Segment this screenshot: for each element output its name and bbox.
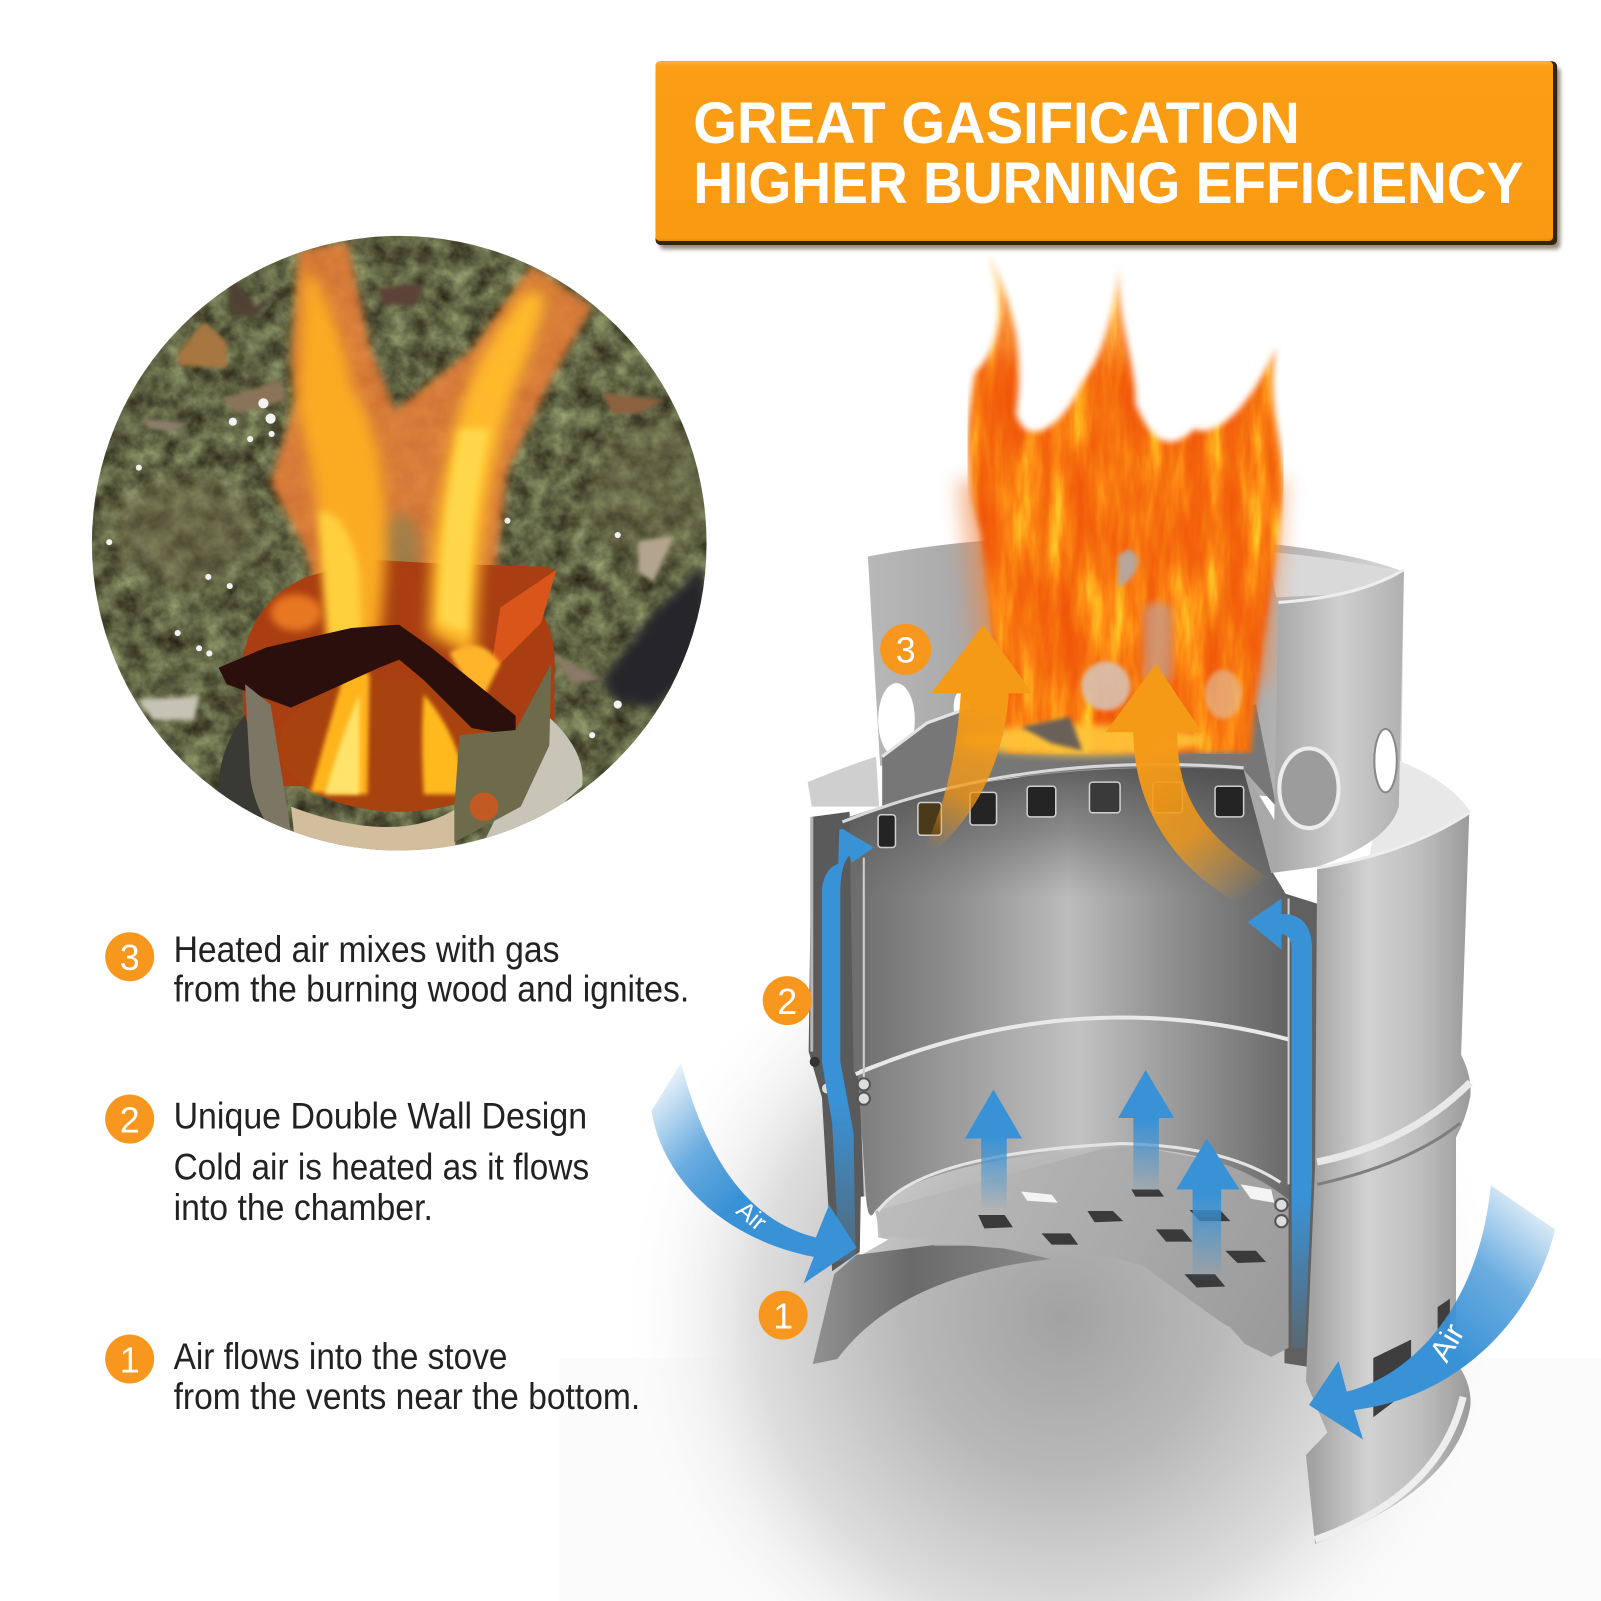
stove: cutaway illustration <box>651 253 1555 1544</box>
blue up arrow 2 <box>1118 1070 1174 1195</box>
flame body <box>968 253 1283 754</box>
step 1 text block: from the vents near the bottom. <box>174 1376 640 1417</box>
left wall column <box>809 812 888 1271</box>
square vent holes <box>878 782 1244 847</box>
number badge 1: 1 <box>120 1340 140 1380</box>
step badge 2 on stove <box>763 976 812 1025</box>
inner chamber upper wall <box>810 764 1289 1227</box>
back of top windscreen <box>868 535 1404 807</box>
photo flame halo and cores <box>266 240 596 576</box>
banner: headline <box>656 61 1560 249</box>
step 1 text block <box>105 1335 640 1417</box>
step badge 3 on stove: 3 <box>896 631 916 671</box>
number badge 3: 3 <box>120 938 140 978</box>
fallen leaves <box>138 268 710 720</box>
grate plate <box>875 1144 1289 1357</box>
blue air intake arrow right <box>1309 1185 1555 1440</box>
number badge 2 <box>105 1095 154 1144</box>
step 2 text block: Cold air is heated as it flows <box>174 1146 589 1187</box>
inner chamber lower wall <box>858 1017 1289 1216</box>
blue up arrow 3 <box>1176 1138 1240 1281</box>
number badge 3 <box>105 932 154 981</box>
step 3 text block <box>105 929 689 1010</box>
photo: inner fire <box>304 644 502 812</box>
blue air intake arrow left <box>651 1063 857 1283</box>
step badge 2 on stove: 2 <box>777 982 797 1022</box>
step 2 text block: Unique Double Wall Design <box>174 1095 587 1136</box>
flame halo <box>958 480 1287 684</box>
floor shadow under the stove <box>560 1021 1601 1601</box>
step badge 1 on stove <box>759 1291 808 1340</box>
top windscreen front panel <box>1244 570 1404 873</box>
blue up arrow 1 <box>965 1089 1022 1210</box>
blue flow up the left wall <box>822 829 874 1261</box>
right wall column <box>1284 893 1317 1368</box>
flame base glow <box>960 725 1205 756</box>
glowing window and vent holes behind flames <box>1081 550 1242 719</box>
grate slots <box>978 1190 1266 1288</box>
photo: flame cores <box>298 265 546 659</box>
bottom-left curved skirt <box>813 1241 1051 1364</box>
step 3 text block: Heated air mixes with gas <box>174 929 560 970</box>
step 2 text block <box>105 1095 589 1228</box>
flames <box>958 253 1287 756</box>
photo: silver pan and tray <box>218 664 583 851</box>
step badge 3 on stove <box>880 624 931 675</box>
number badge 2: 2 <box>120 1100 140 1140</box>
step 2 text block: into the chamber. <box>174 1187 433 1228</box>
label: air right: Air <box>1423 1318 1471 1367</box>
step 1 text block: Air flows into the stove <box>174 1336 507 1377</box>
outer top rim and inner platform <box>808 705 1470 868</box>
blue flow up the right wall <box>1248 899 1312 1348</box>
step badge 1 on stove: 1 <box>773 1296 793 1336</box>
step 3 text block: from the burning wood and ignites. <box>174 969 689 1010</box>
circular photo: stove burning on grass <box>92 236 715 851</box>
heading line 1: GREAT GASIFICATION <box>693 91 1300 156</box>
grass background <box>92 236 715 851</box>
number badge 1 <box>105 1335 154 1384</box>
hail dots <box>106 398 622 738</box>
label: air left: Air <box>731 1196 771 1236</box>
orange airflow arrow left <box>924 625 1032 850</box>
outer front panel <box>1306 813 1471 1544</box>
photo: dark serrated pot supports <box>219 625 516 736</box>
heading line 2: HIGHER BURNING EFFICIENCY <box>693 151 1523 216</box>
orange airflow arrow right <box>1106 664 1267 904</box>
photo: back ring of stove <box>242 560 556 786</box>
